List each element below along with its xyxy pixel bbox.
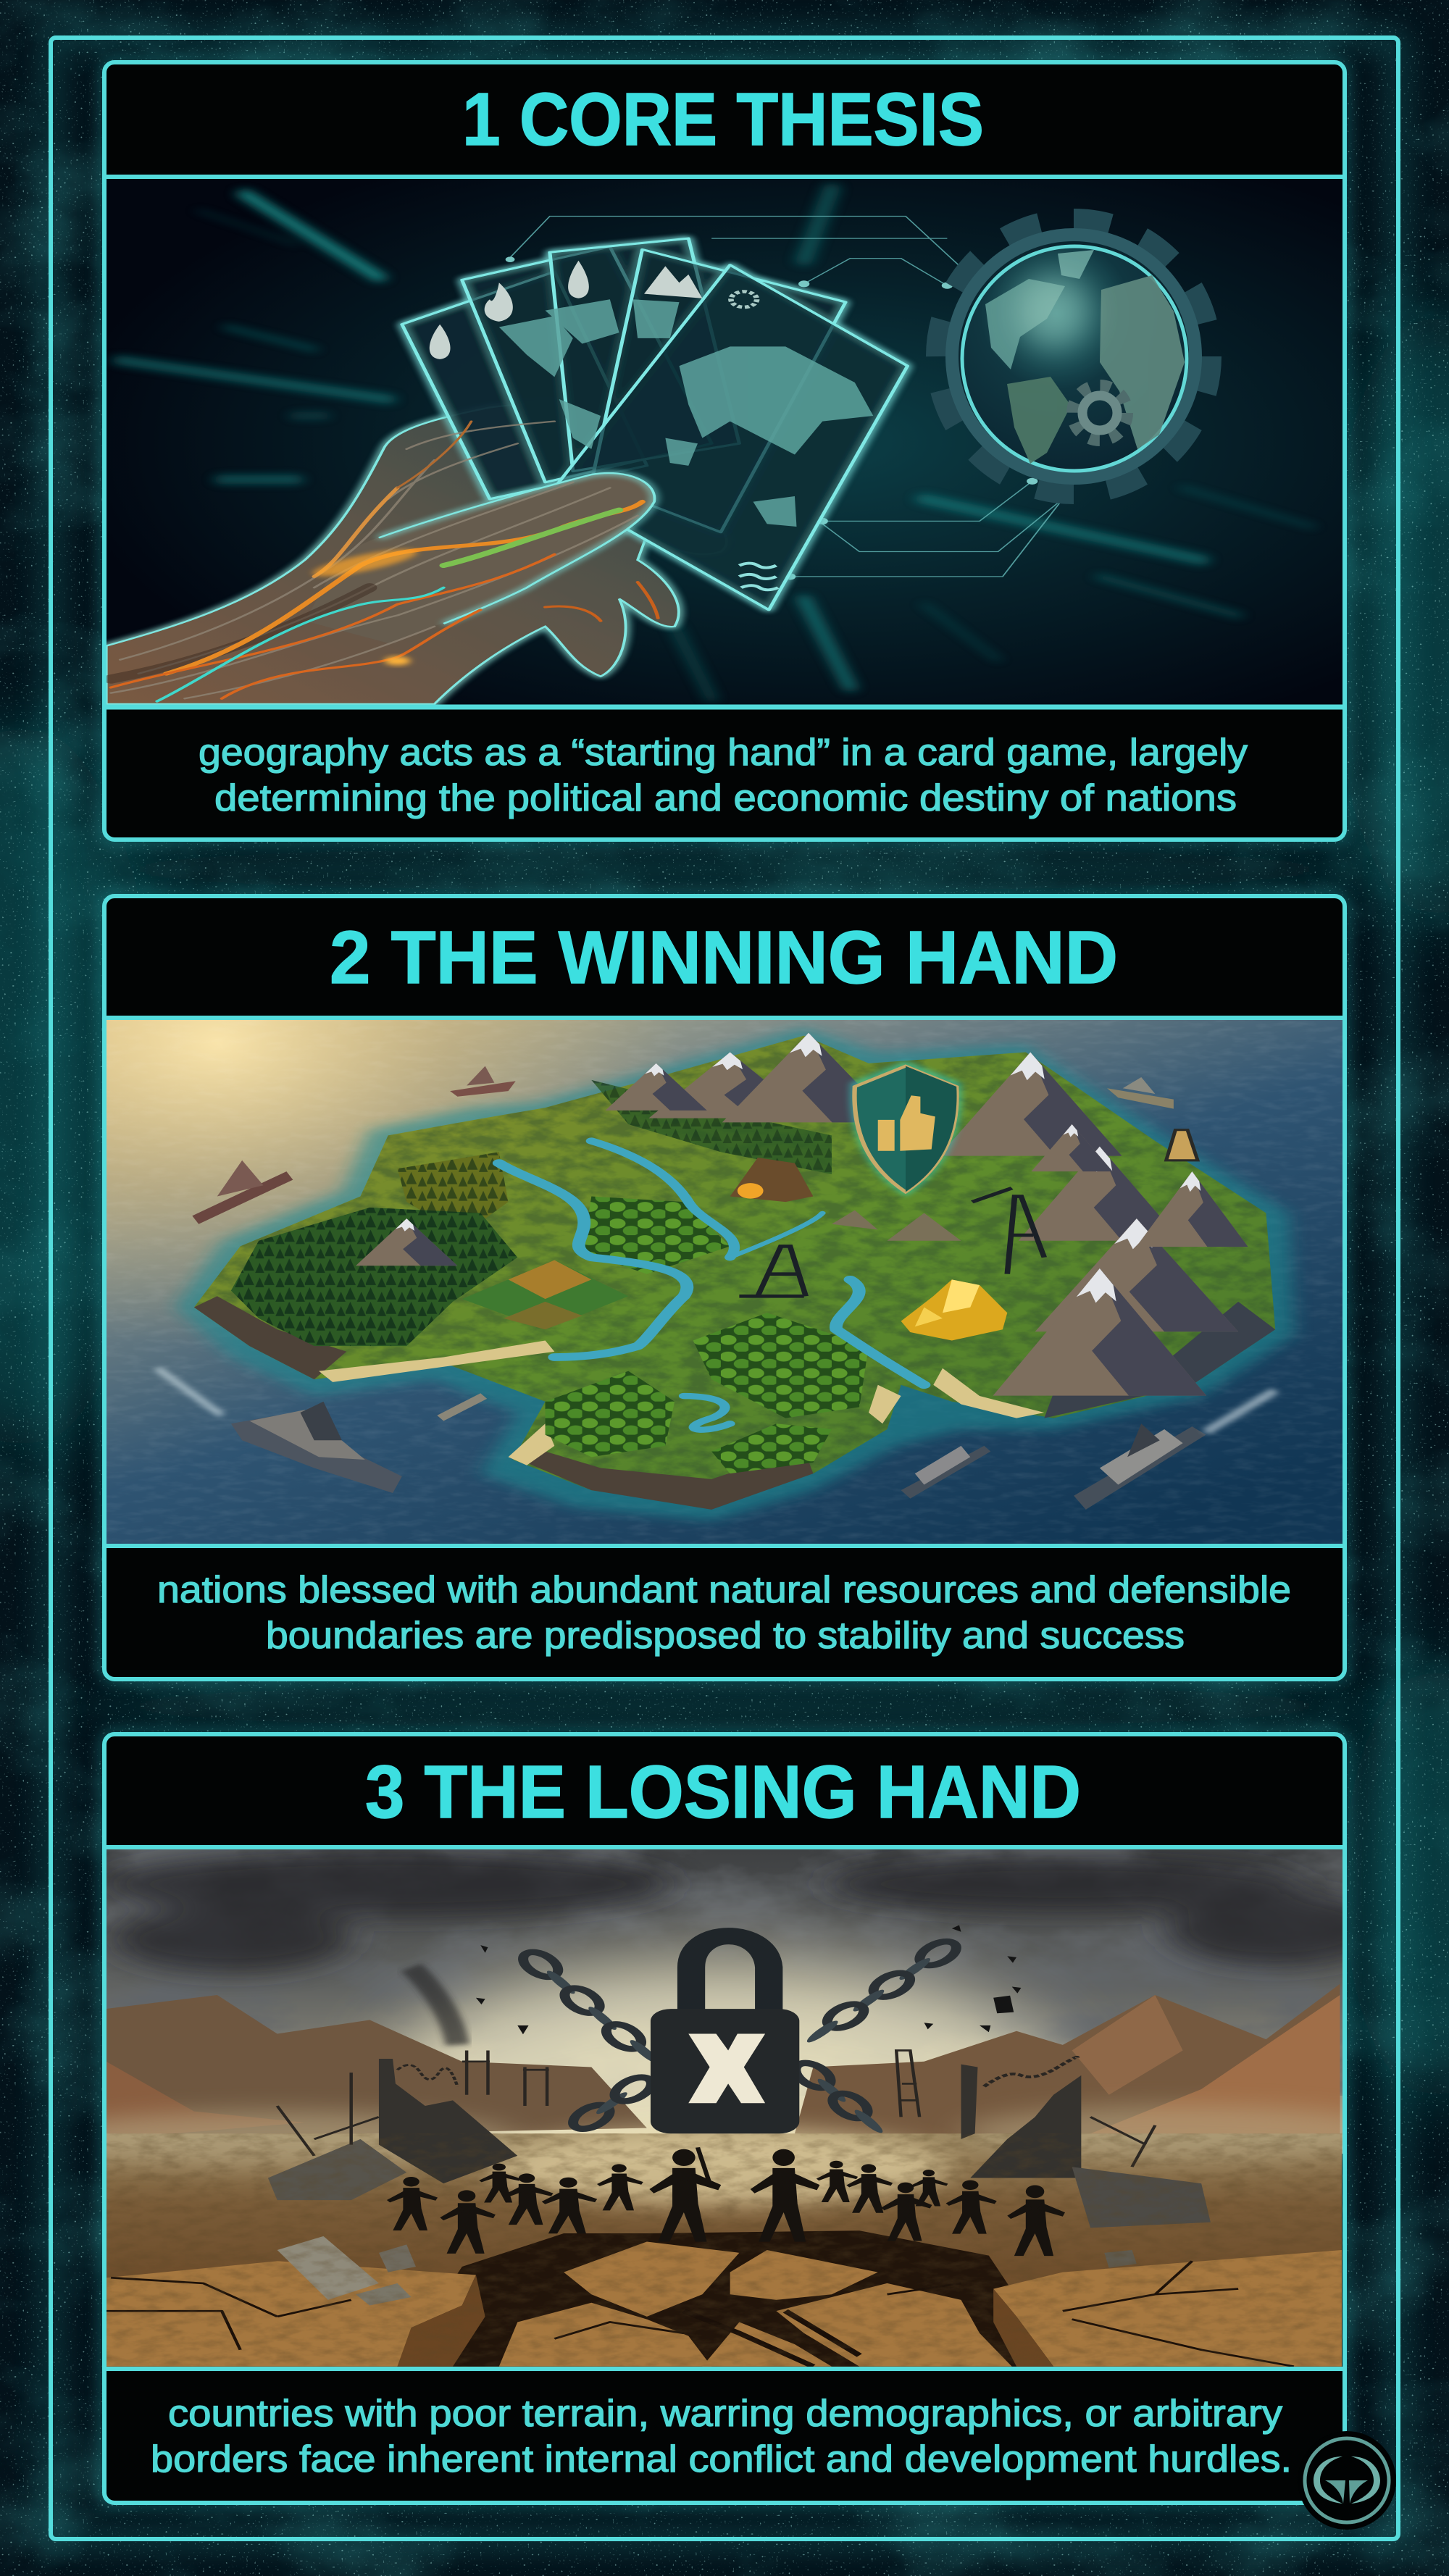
broken chains: [476, 1925, 1021, 2135]
padlock with X: [651, 1936, 799, 2133]
desert mountains: [107, 1995, 647, 2139]
caption: the losing hand: [151, 2393, 1292, 2480]
gold pile: [901, 1279, 1007, 1341]
hand: palm and wrist: [107, 403, 727, 704]
illustration: resource-rich island ringed by warships: [0, 739, 1342, 1544]
caption: the losing hand: countries with poor terrain, warring demographics, or arbitrary: [168, 2393, 1282, 2435]
mountains: [356, 1033, 1248, 1396]
logo badge: [1298, 2431, 1396, 2530]
shield emblem with thumbs up: [850, 1061, 961, 1197]
fighting silhouettes: [387, 2149, 1065, 2256]
cracked earth: [107, 2133, 1342, 2367]
flying debris: [476, 1925, 1021, 2034]
crevasses and cracked plates: [107, 2230, 1342, 2367]
storm clouds: [101, 1851, 1386, 1973]
beaches: [319, 1341, 1044, 1465]
globe: [962, 246, 1187, 471]
light rays: [120, 188, 1312, 698]
caption: core thesis: [199, 732, 1248, 819]
heading: the winning hand: 2 THE WINNING HAND: [330, 916, 1118, 999]
caption: core thesis: determining the political and economic destiny of nations: [214, 777, 1237, 819]
shallow water halo: [175, 1027, 1294, 1521]
panel: 2 the winning hand: [0, 739, 1345, 1679]
caption: the losing hand: borders face inherent internal conflict and development hurdles.: [151, 2438, 1292, 2480]
rocky coast: [194, 1296, 1275, 1510]
rivers: [499, 1141, 924, 1430]
illustration: broken land, conflict and padlock: [37, 1849, 1405, 2367]
card map and resource icons: [430, 261, 873, 590]
heading: the losing hand: 3 THE LOSING HAND: [365, 1750, 1081, 1833]
dust haze: [37, 2112, 517, 2167]
oil derricks: [739, 1188, 1044, 1296]
panel: 1 core thesis: [104, 62, 1345, 840]
farm fields: [462, 1260, 628, 1329]
island landmass: [194, 1036, 1275, 1507]
gear ring: [940, 223, 1207, 490]
smoke column: [412, 1967, 457, 2045]
caption: the winning hand: nations blessed with abundant natural resources and defensible: [157, 1569, 1291, 1611]
caption: the winning hand: boundaries are predisposed to stability and success: [266, 1615, 1185, 1657]
caption: the winning hand: [157, 1569, 1291, 1657]
ruined walls and rubble: [268, 2059, 1211, 2228]
caption: core thesis: geography acts as a “starting hand” in a card game, largely: [199, 732, 1248, 774]
mining camp: [730, 1158, 961, 1241]
circuit connector lines: [506, 216, 1068, 580]
heading: core thesis: 1 CORE THESIS: [462, 78, 984, 161]
bell marker: [1166, 1130, 1198, 1161]
hand: thumb and strata veins: [111, 422, 658, 701]
warships: [157, 1066, 1275, 1510]
illustration: hand of map cards and gear globe: [107, 179, 1342, 705]
fan of transparent map cards: [402, 238, 908, 610]
broken stone blocks: [277, 2236, 1137, 2306]
panel: 3 the losing hand: [37, 1734, 1405, 2503]
forests: [397, 1152, 509, 1235]
